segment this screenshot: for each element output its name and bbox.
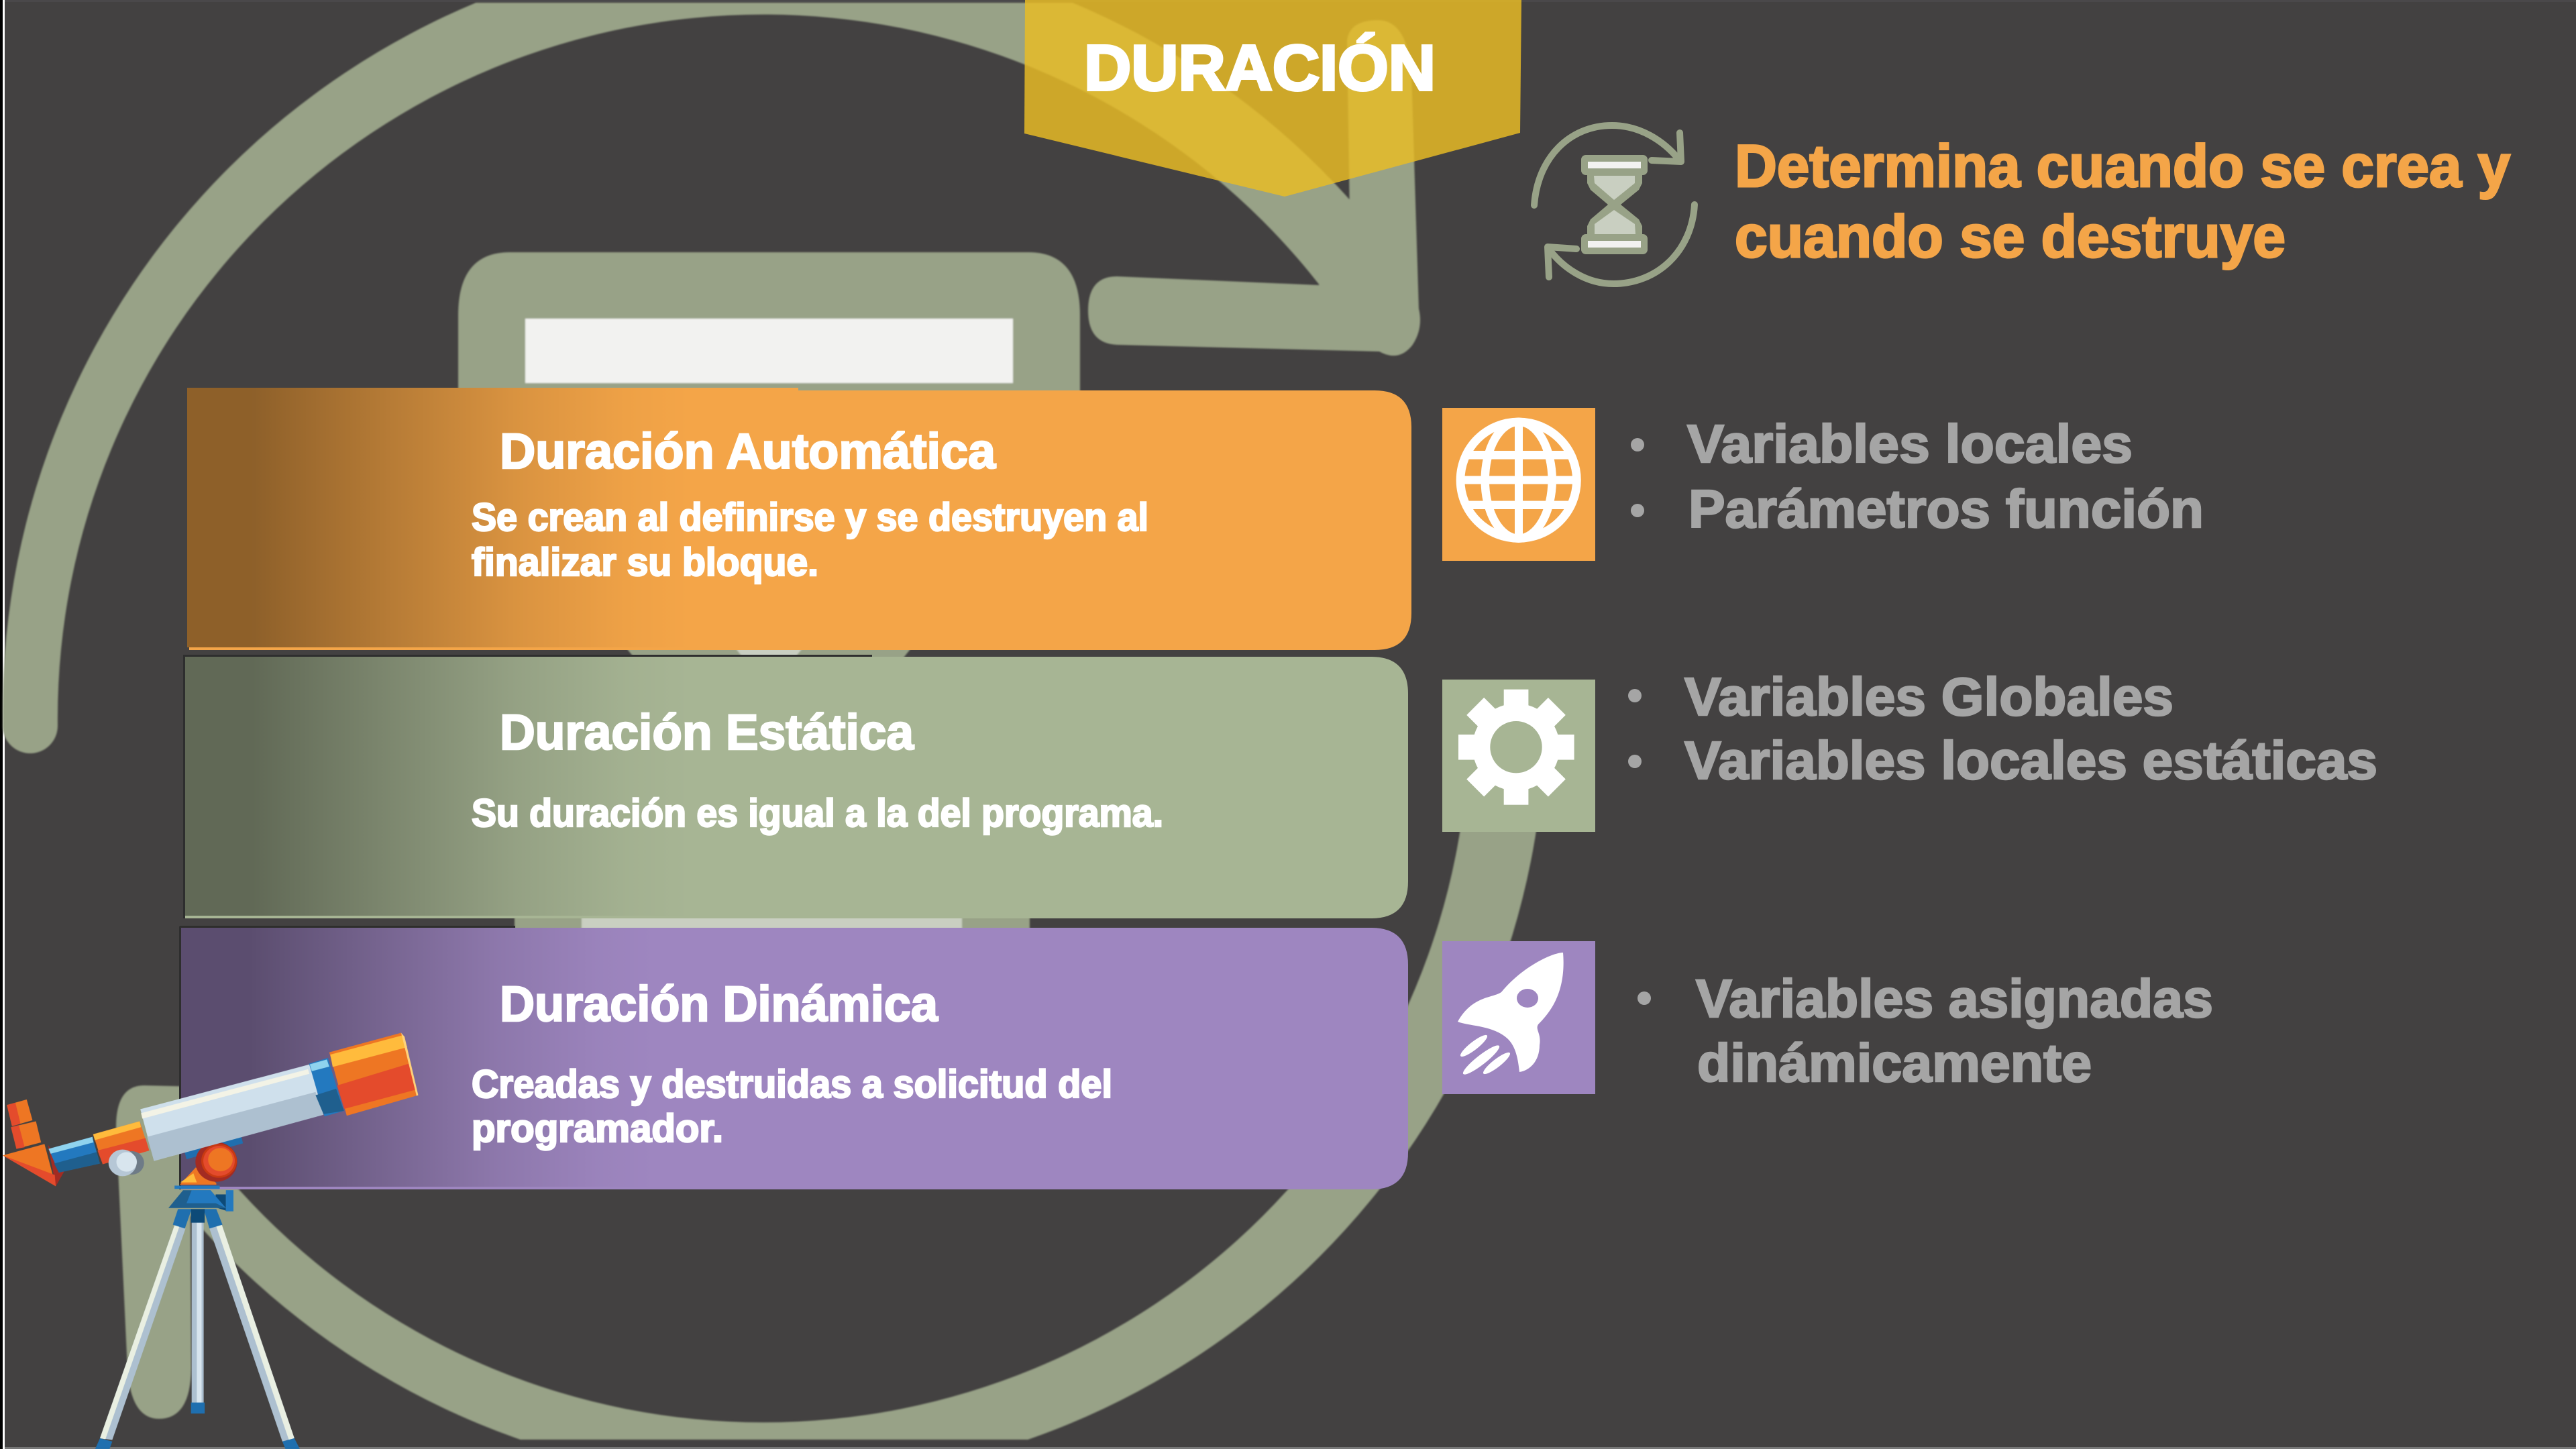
list: static variables: Variables Globales: [1684, 667, 2174, 727]
heading: Duración Automática: [500, 423, 996, 479]
tube: blue ring: [309, 1058, 344, 1116]
background icon: large cycle arrows with hourglass: [3, 0, 1546, 1449]
list: dynamic variables: [1638, 969, 2213, 1093]
tube: rear sections: [48, 1121, 149, 1176]
panel: duración dinámica: [180, 926, 1408, 1189]
icon: rocket: [1442, 941, 1595, 1094]
icon: hourglass with cycle arrows: [1534, 125, 1695, 284]
title: DURACIÓN: [1084, 32, 1436, 104]
panel: duración estática: [184, 656, 1408, 918]
panel: duración automática: [187, 388, 1411, 650]
list: dynamic variables: Variables asignadas: [1696, 969, 2213, 1028]
list: static variables: [1628, 667, 2377, 790]
eyepiece: [3, 1099, 65, 1186]
description: Creadas y destruidas a solicitud del: [472, 1063, 1112, 1106]
lower ring arc with arrow: [115, 832, 1537, 1441]
mount: [168, 1134, 243, 1212]
heading: Duración Estática: [500, 704, 914, 760]
illustration: telescope: [3, 1033, 418, 1449]
tube: main body: [140, 1065, 323, 1161]
banner: title ribbon: [1024, 0, 1521, 197]
heading: Duración Dinámica: [500, 976, 938, 1032]
icon: globe: [1442, 408, 1595, 561]
icon: gear: [1442, 680, 1595, 832]
central hourglass: [458, 252, 1080, 932]
description: programador.: [472, 1107, 723, 1150]
list: automatic variables: Variables locales: [1687, 414, 2133, 474]
upper ring arc with arrow: [1, 1, 1421, 754]
list: static variables: Variables locales estáticas: [1684, 731, 2377, 790]
description: Su duración es igual a la del programa.: [472, 792, 1163, 835]
heading: definition: [1735, 132, 2510, 270]
tube: front lens hood: [329, 1033, 418, 1116]
heading: definition: cuando se destruye: [1735, 203, 2286, 270]
list: automatic variables: Parámetros función: [1688, 479, 2204, 539]
description: Se crean al definirse y se destruyen al: [472, 496, 1148, 539]
description: [472, 1063, 1112, 1150]
description: finalizar su bloque.: [472, 541, 818, 584]
list: dynamic variables: dinámicamente: [1697, 1033, 2092, 1093]
tripod legs: [95, 1209, 300, 1449]
description: [472, 496, 1148, 584]
list: automatic variables: [1631, 414, 2204, 539]
heading: definition: Determina cuando se crea y: [1735, 132, 2510, 199]
